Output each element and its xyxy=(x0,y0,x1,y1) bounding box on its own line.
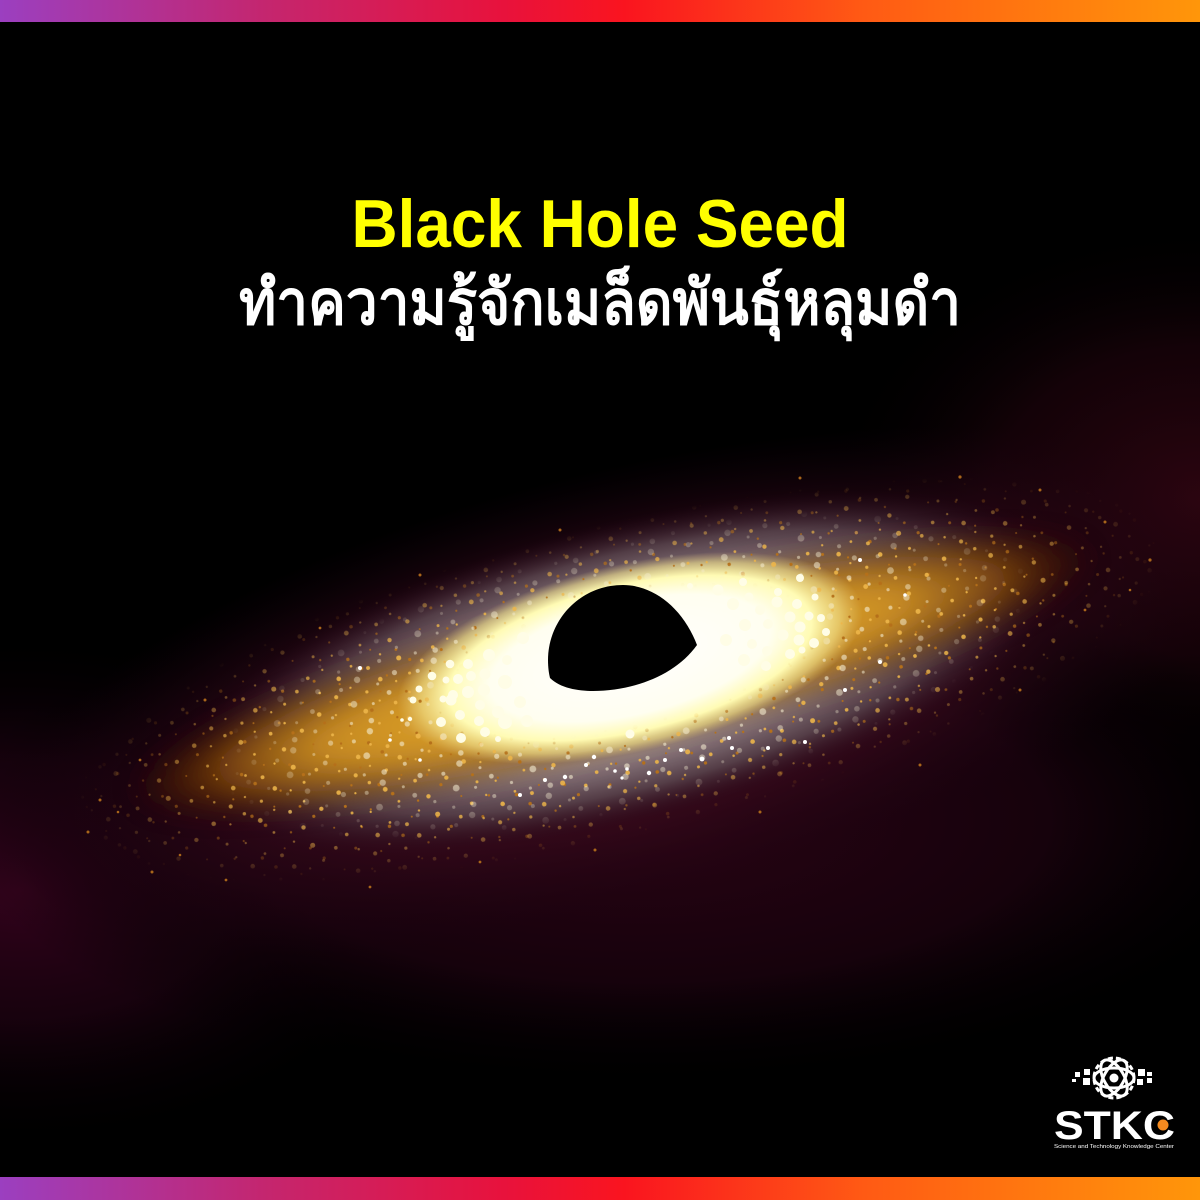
disk glow xyxy=(0,322,1200,1058)
icon: orange dot xyxy=(1158,1120,1168,1130)
icon: atom xyxy=(1094,1056,1134,1100)
scattered star particles xyxy=(86,480,1152,879)
top gradient bar xyxy=(0,0,1200,22)
wordmark: STKC xyxy=(1054,1104,1175,1148)
icon: pixel squares xyxy=(1072,1069,1152,1085)
bottom gradient bar xyxy=(0,1177,1200,1200)
heading: thai: ทำความรู้จักเมล็ดพันธุ์หลุมดำ xyxy=(239,265,961,341)
black hole xyxy=(548,585,697,691)
galaxy accretion disk xyxy=(82,460,1152,888)
white lower particles xyxy=(358,558,907,797)
heading: english: Black Hole Seed xyxy=(352,186,848,262)
outlying gold particles xyxy=(86,475,1152,888)
title xyxy=(239,186,961,341)
tagline: Science and Technology Knowledge Center xyxy=(1054,1144,1174,1150)
bright inner particles xyxy=(400,574,830,743)
logo: STKC xyxy=(1054,1056,1175,1150)
